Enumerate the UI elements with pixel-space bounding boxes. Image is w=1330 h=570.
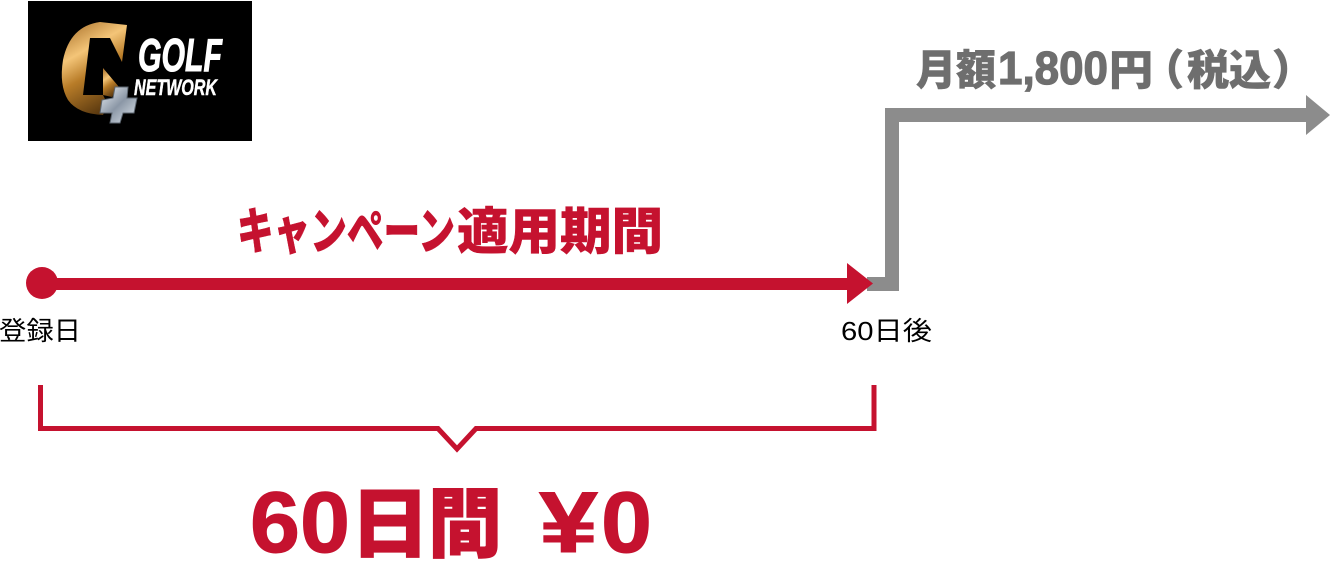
free period price: 間 (428, 483, 502, 568)
free period price: 60 (250, 475, 350, 570)
campaign heading: キャンペーン (237, 204, 455, 260)
monthly price label: ） (1272, 47, 1314, 94)
monthly price label: 円 (1109, 47, 1153, 94)
monthly price label: （ (1142, 47, 1184, 94)
bracket (40, 385, 874, 449)
free period price: 0 (601, 475, 652, 570)
red arrow: campaign period (26, 263, 873, 304)
free period price: 日 (350, 483, 430, 568)
label: 60 days later: 60日後 (841, 316, 932, 346)
logo: G+ Golf Network: GOLF (138, 29, 223, 81)
logo: G+ Golf Network: NETWORK (134, 75, 219, 100)
monthly price label: 税込 (1187, 47, 1271, 94)
monthly price label: 月額 (916, 47, 996, 94)
label: registration date: 登録日 (0, 316, 81, 346)
logo: G+ Golf Network (28, 1, 252, 141)
monthly price label: 1,800 (998, 42, 1108, 94)
free period price (250, 475, 652, 570)
gray arrow: after campaign (867, 95, 1330, 284)
free period price: ¥ (539, 475, 598, 570)
campaign heading (237, 204, 663, 260)
campaign heading: 適用期間 (457, 204, 663, 260)
monthly price label (916, 42, 1314, 94)
